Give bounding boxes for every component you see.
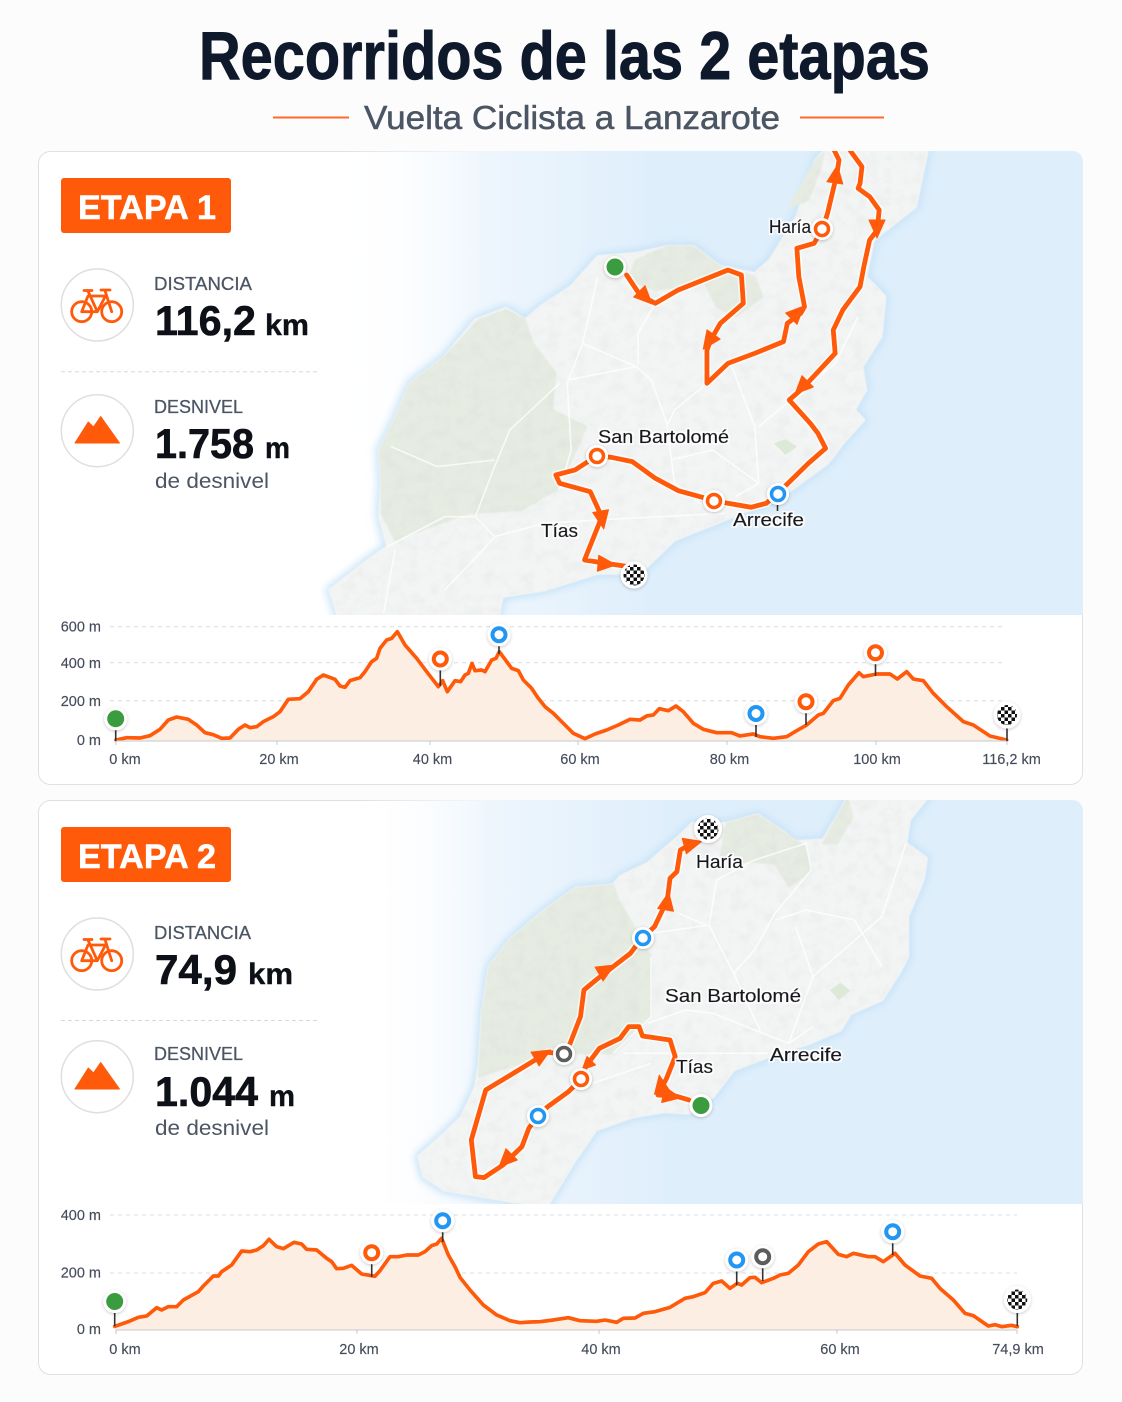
stat: distancia etapa 1: 116,2	[155, 297, 256, 344]
badge: etapa 2	[61, 827, 231, 882]
elevation chart: etapa 2	[61, 1208, 1044, 1358]
badge: etapa 1: ETAPA 1	[78, 189, 216, 227]
route arrows: etapa 2	[493, 834, 704, 1173]
icon: mountain	[61, 1041, 133, 1113]
stat: desnivel etapa 2: m	[269, 1080, 295, 1113]
map markers: etapa 1	[586, 218, 833, 588]
y axis labels: 200 m	[61, 694, 101, 710]
stat: distancia etapa 1: DISTANCIA	[154, 274, 252, 294]
map labels: etapa 2: San Bartolomé	[665, 985, 801, 1006]
y axis labels	[61, 1208, 101, 1338]
y axis labels: 600 m	[61, 620, 101, 636]
stat: distancia etapa 2: km	[248, 958, 293, 991]
icon: bicycle	[61, 918, 133, 990]
x axis labels: 100 km	[853, 752, 901, 768]
x axis labels: 60 km	[820, 1342, 860, 1358]
x axis labels: 0 km	[109, 752, 141, 768]
icon: mountain	[61, 395, 133, 467]
x axis labels: 40 km	[581, 1342, 621, 1358]
x axis labels: 74,9 km	[992, 1342, 1044, 1358]
stat: desnivel etapa 1: DESNIVEL	[154, 397, 243, 417]
map: etapa 1	[322, 151, 1083, 615]
route arrows: etapa 1	[593, 164, 885, 573]
y axis labels	[61, 620, 101, 749]
stat: distancia etapa 2	[154, 923, 293, 993]
badge: etapa 2: ETAPA 2	[78, 838, 216, 876]
chart markers	[104, 623, 1020, 741]
subtitle: Vuelta Ciclista a Lanzarote	[364, 99, 780, 136]
map labels: etapa 1	[541, 216, 812, 541]
y axis labels: 400 m	[61, 656, 101, 672]
map labels: etapa 1: San Bartolomé	[598, 426, 729, 447]
map markers: etapa 2	[527, 815, 722, 1127]
stat: desnivel etapa 2: de desnivel	[155, 1117, 269, 1140]
icon: bicycle	[61, 269, 133, 341]
x axis labels: 80 km	[710, 752, 749, 768]
map labels: etapa 1: Tías	[541, 520, 578, 541]
map labels: etapa 2	[665, 851, 842, 1077]
stat: desnivel etapa 1: m	[265, 432, 290, 465]
elevation chart: etapa 1	[61, 620, 1041, 768]
map labels: etapa 2: Tías	[676, 1056, 713, 1077]
x axis labels	[109, 752, 1041, 768]
route: etapa 2	[471, 843, 692, 1178]
y axis labels: 0 m	[77, 733, 101, 749]
map labels: etapa 1: Haría	[769, 216, 812, 237]
x axis labels: 20 km	[339, 1342, 379, 1358]
map: etapa 2	[396, 800, 1083, 1204]
stat: desnivel etapa 1: de desnivel	[155, 470, 269, 493]
panel: etapa 2	[38, 798, 1083, 1374]
stat: distancia etapa 2: 74,9	[155, 946, 237, 993]
title: Recorridos de las 2 etapas	[199, 18, 930, 94]
map labels: etapa 2: Arrecife	[770, 1044, 842, 1065]
panel: etapa 1	[38, 148, 1083, 784]
x axis labels: 116,2 km	[982, 752, 1041, 768]
y axis labels: 400 m	[61, 1208, 101, 1224]
badge: etapa 1	[61, 178, 231, 233]
map labels: etapa 2: Haría	[696, 851, 744, 872]
route: etapa 1	[556, 148, 879, 567]
stat: desnivel etapa 2: DESNIVEL	[154, 1044, 243, 1064]
y axis labels: 200 m	[61, 1266, 101, 1282]
map labels: etapa 1: Arrecife	[733, 509, 804, 530]
chart markers	[103, 1209, 1031, 1326]
stat: desnivel etapa 2	[154, 1044, 295, 1140]
stat: desnivel etapa 1	[154, 397, 290, 493]
y axis labels: 0 m	[77, 1322, 101, 1338]
x axis labels	[109, 1342, 1044, 1358]
x axis labels: 60 km	[560, 752, 600, 768]
x axis labels: 20 km	[259, 752, 299, 768]
x axis labels: 0 km	[109, 1342, 141, 1358]
x axis labels: 40 km	[413, 752, 452, 768]
stat: desnivel etapa 1: 1.758	[155, 420, 254, 467]
stat: distancia etapa 2: DISTANCIA	[154, 923, 251, 943]
stat: distancia etapa 1: km	[265, 309, 309, 342]
stat: desnivel etapa 2: 1.044	[155, 1068, 259, 1115]
stat: distancia etapa 1	[154, 274, 309, 344]
